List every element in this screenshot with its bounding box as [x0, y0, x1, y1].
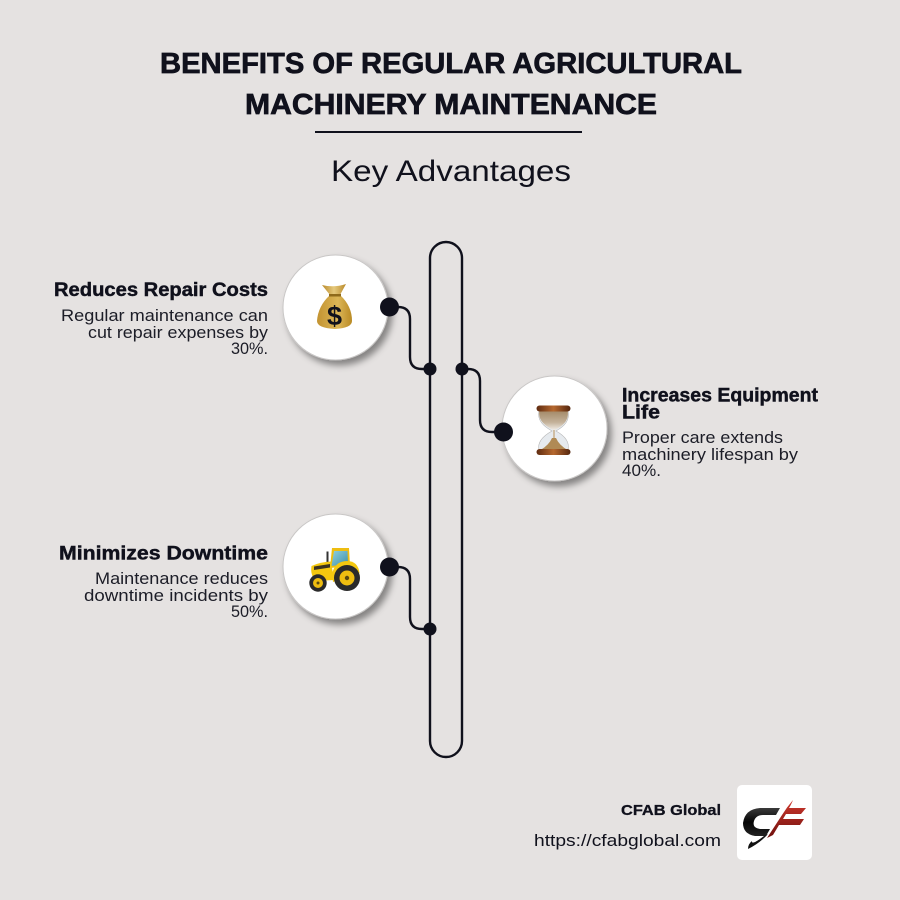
- title: MACHINERY MAINTENANCE: [245, 89, 657, 121]
- text: reduces repair costs: Regular maintenance can: [61, 307, 268, 325]
- icon circle: money bag: [283, 255, 388, 360]
- connector: [456, 362, 513, 442]
- text: increases equipment life: Proper care extends: [622, 429, 783, 447]
- text: minimizes downtime: 50%.: [231, 603, 268, 621]
- text: reduces repair costs: 30%.: [231, 340, 268, 358]
- connector: [380, 558, 436, 636]
- icon circle: money bag: $: [327, 301, 342, 331]
- title underline: [315, 131, 582, 133]
- subtitle: Key Advantages: [331, 155, 571, 188]
- text: reduces repair costs: Reduces Repair Costs: [54, 280, 268, 301]
- text: minimizes downtime: Maintenance reduces: [95, 570, 268, 588]
- connector: [380, 298, 436, 376]
- panel: minimizes downtime: [59, 514, 436, 636]
- text: increases equipment life: 40%.: [622, 462, 661, 480]
- title: BENEFITS OF REGULAR AGRICULTURAL: [160, 48, 742, 80]
- text: reduces repair costs: cut repair expenses by: [88, 324, 269, 342]
- text: increases equipment life: machinery lifespan by: [622, 446, 799, 464]
- text: minimizes downtime: downtime incidents by: [84, 587, 269, 605]
- text: reduces repair costs: [54, 280, 269, 358]
- website url: https://cfabglobal.com: [534, 832, 721, 850]
- icon circle: tractor: [283, 514, 388, 619]
- icon circle: hourglass: [502, 376, 607, 481]
- panel: increases equipment life: [456, 362, 819, 481]
- text: minimizes downtime: [59, 544, 269, 621]
- text: increases equipment life: Increases Equipment: [622, 386, 819, 406]
- text: increases equipment life: [622, 386, 819, 480]
- brand name: CFAB Global: [621, 802, 721, 819]
- text: increases equipment life: Life: [622, 402, 660, 424]
- text: minimizes downtime: Minimizes Downtime: [59, 544, 268, 564]
- central pill track: [430, 242, 462, 757]
- footer: brand: [534, 802, 721, 850]
- title: [160, 48, 742, 121]
- panel: reduces repair costs: [54, 255, 436, 376]
- logo: [737, 785, 812, 860]
